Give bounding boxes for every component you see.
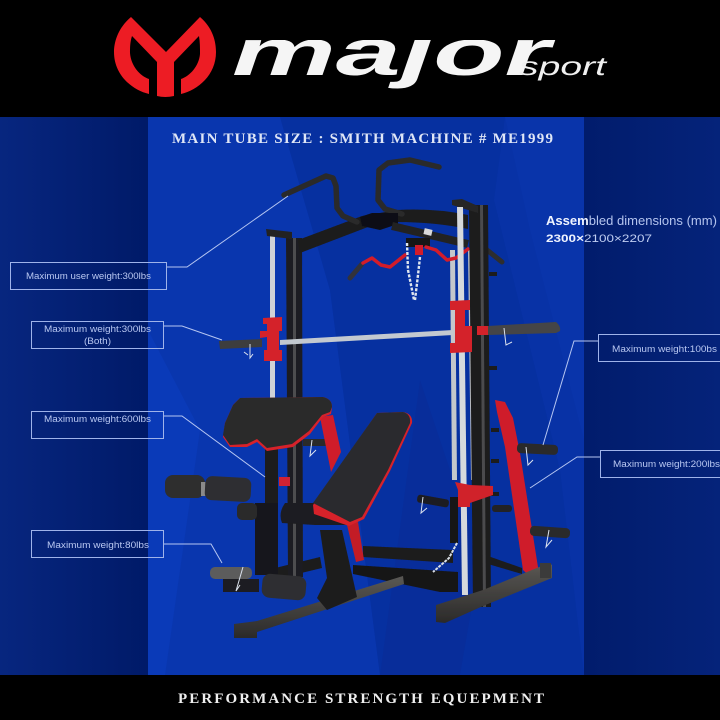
- logo wordmark: sport: sport: [519, 51, 609, 81]
- callout: maximum weight 300lbs both: (Both): [84, 336, 111, 346]
- dimensions text: [546, 214, 717, 245]
- footer tagline: PERFORMANCE STRENGTH EQUEPMENT: [178, 691, 544, 707]
- preacher red post: [320, 415, 341, 472]
- callout: maximum weight 200lbs: [530, 450, 720, 488]
- smith machine illustration: [165, 160, 570, 638]
- arch crossbar: [298, 210, 468, 253]
- chain: [407, 243, 420, 300]
- callout: maximum weight 300lbs both: Maximum weight:300lbs: [44, 324, 152, 334]
- bench seat: [281, 503, 350, 525]
- left red carriage clamp: [260, 317, 282, 361]
- callout: maximum user weight 300lbs: [10, 196, 288, 290]
- bench A-frame leg: [317, 530, 357, 610]
- right base beam: [436, 563, 552, 623]
- red side brace: [495, 400, 540, 583]
- title: MAIN TUBE SIZE : SMITH MACHINE # ME1999: [172, 131, 553, 147]
- callout: maximum user weight 300lbs: Maximum user weight:300lbs: [26, 271, 152, 281]
- centre block: [360, 213, 398, 230]
- callout: maximum weight 600lbs: Maximum weight:600lbs: [44, 414, 152, 424]
- right upright post: [452, 199, 499, 607]
- red lat bar: [350, 245, 468, 278]
- bench base beam: [234, 576, 404, 638]
- left barbell sleeve: [219, 339, 262, 349]
- leg extension upper rollers: [165, 475, 257, 520]
- background panel: blue backdrop: [0, 117, 720, 675]
- peg hooks: [236, 328, 552, 591]
- callout: maximum weight 100bs: [543, 334, 720, 445]
- logo wordmark: major: major: [232, 15, 556, 89]
- dimensions text: Assembled dimensions (mm): [546, 214, 717, 228]
- callout: maximum weight 200lbs: Maximum weight:200lbs: [613, 459, 720, 469]
- end plate: [540, 563, 551, 578]
- bench lower red post: [347, 522, 364, 562]
- right pull-up handle: [378, 160, 439, 214]
- callout: maximum weight 600lbs: [32, 412, 265, 477]
- preacher column: [255, 448, 290, 575]
- lower chain: [433, 543, 457, 572]
- right guide rod: [457, 207, 468, 595]
- right red carriage clamp: [450, 300, 472, 353]
- lower carriage bracket: [450, 497, 458, 543]
- logo: red M/Y emblem: [114, 17, 216, 97]
- red lower carriage: [455, 482, 493, 507]
- footer band: [0, 675, 720, 720]
- weight pegs: [303, 439, 570, 538]
- dimensions text: 2300× 2100×2207: [546, 233, 652, 245]
- callout: maximum weight 300lbs both: [32, 322, 222, 348]
- rear rods and base beams: [267, 235, 522, 592]
- callout: maximum weight 80lbs: [32, 530, 222, 563]
- right red connector: [477, 326, 488, 335]
- callout: maximum weight 80lbs: Maximum weight:80lbs: [47, 540, 150, 550]
- right barbell sleeve: [488, 322, 560, 335]
- incline back pad: [313, 412, 412, 526]
- left pull-up handle: [284, 176, 357, 222]
- callout: maximum weight 100bs: Maximum weight:100bs: [612, 344, 718, 354]
- left upright post: [266, 229, 303, 577]
- lat pulley bar: [392, 226, 502, 262]
- leg extension lower handle and roller: [210, 567, 307, 601]
- barbell bar: [280, 330, 453, 345]
- preacher pad: [223, 397, 332, 451]
- header band: [0, 0, 720, 117]
